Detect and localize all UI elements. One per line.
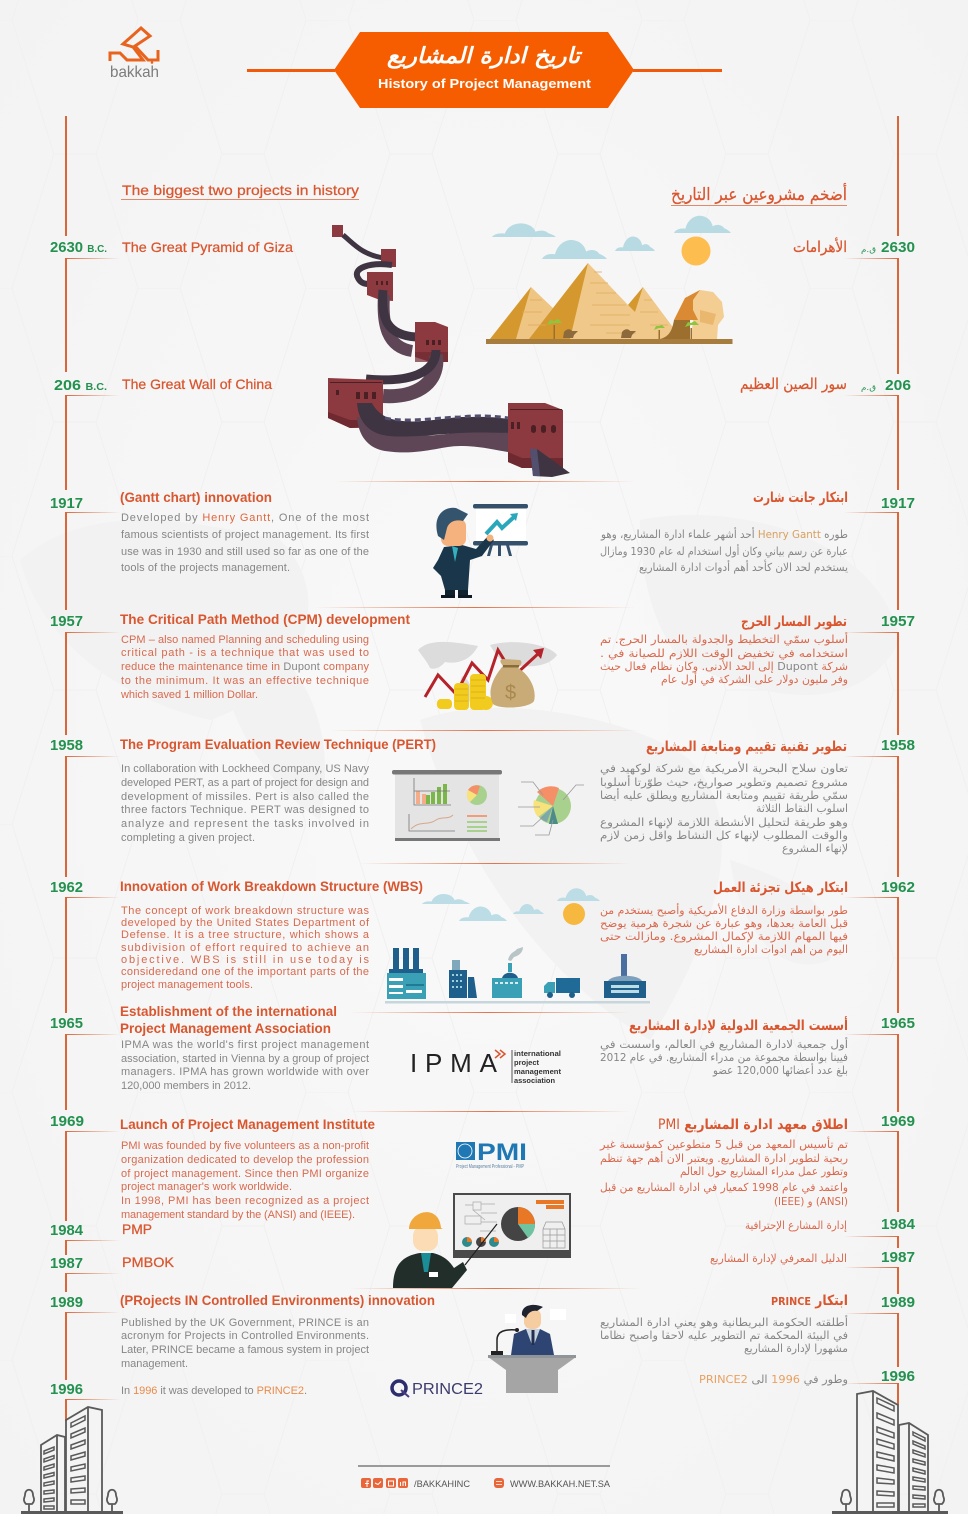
section: 1958 PERT, left: 1958: [50, 737, 83, 754]
illustration: speaker at podium: [488, 1305, 576, 1393]
body: PMI Arabic: [599, 1136, 848, 1208]
section: 1962 WBS, left: [50, 878, 423, 991]
section: 1957 CPM, right: [600, 613, 915, 686]
body: PERT Arabic: تعاون سلاح البحرية الأمريكية مع شركة لوكهيد في: [600, 761, 848, 775]
body: WBS: [121, 905, 370, 991]
body: PERT: development of missiles. Pert is also called the: [121, 791, 369, 803]
body: PMI Arabic: واعتمد في عام 1998 كمعيار في ادارة المشاريع من قبل: [600, 1181, 848, 1194]
title: English: History of Project Management: [378, 76, 592, 91]
body: Gantt chart: [121, 512, 369, 574]
illustration: presentation board and pie chart: [392, 770, 584, 841]
heading: WBS: Innovation of Work Breakdown Structure (WBS): [120, 878, 423, 894]
text: social handle: /BAKKAHINC: [414, 1479, 470, 1490]
body: PERT: analyze and represent the tasks involved in: [121, 818, 369, 830]
body: PERT Arabic: اسلوب النقاط الثلاثة: [756, 802, 848, 815]
logo: PMI: PMI: [477, 1139, 527, 1166]
logo: bakkah: bakkah: [110, 64, 159, 81]
section: 1989 PRINCE, left: 1989: [50, 1294, 83, 1311]
section: 1965 IPMA, right: 1965: [881, 1015, 915, 1032]
body: PRINCE: management.: [121, 1358, 188, 1370]
timeline: right: [844, 116, 899, 1405]
year: 1987 PMBOK: 1987: [50, 1255, 83, 1272]
body: PMI Arabic: تم تأسيس المعهد من قبل 5 متطوعين كمؤسسة غير: [599, 1136, 848, 1151]
body: PRINCE: Published by the UK Government, PRINCE is an: [121, 1317, 369, 1329]
body: PERT: In collaboration with Lockheed Company, US Navy: [121, 763, 370, 775]
body: CPM: which saved 1 million Dollar.: [120, 689, 258, 701]
body: WBS: developed by the United States Department of: [121, 917, 370, 929]
body: PRINCE: acronym for Projects in Controlled Environments.: [121, 1330, 369, 1342]
body: WBS Arabic: قبل العامة بعدها، وهو عبارة عن شجرة هرمية يوضح: [600, 917, 848, 930]
body: IPMA: [121, 1039, 369, 1092]
body: PERT Arabic: مشروع تصميم وتطوير صواريخ، حيث طوّرتا أسلوبا: [600, 775, 848, 789]
body: WBS Arabic: [600, 903, 848, 956]
section: 1969 PMI, right: [599, 1113, 916, 1266]
year: 1987 PMBOK: PMBOK: [122, 1254, 175, 1270]
year: 1987 PMBOK: [50, 1254, 175, 1272]
body: PRINCE: Later, PRINCE became a famous system in project: [121, 1344, 369, 1356]
heading: Gantt chart: (Gantt chart) innovation: [120, 489, 272, 505]
body: IPMA Arabic: فيينا بواسطة مجموعة من مدراء المشاريع. في عام 2012: [600, 1051, 848, 1064]
heading: CPM: The Critical Path Method (CPM) development: [120, 611, 410, 627]
body: PERT Arabic: لإنهاء المشروع: [782, 842, 848, 855]
section: 1957 CPM, left: 1957: [50, 613, 83, 630]
section: biggest projects, right: [671, 183, 915, 394]
heading: WBS Arabic: ابتكار هيكل تجزئة العمل: [713, 880, 848, 896]
body: WBS: project management tools.: [121, 979, 253, 991]
year: 1984 PMP: 1984: [50, 1222, 84, 1239]
year: 1996 Arabic: وطور في 1996 الى PRINCE2: [699, 1373, 848, 1386]
heading: IPMA: Project Management Association: [120, 1020, 331, 1036]
section: 1957 CPM, right: 1957: [881, 613, 915, 630]
heading: IPMA: Establishment of the international: [120, 1003, 337, 1019]
body: PRINCE Arabic: [600, 1315, 848, 1355]
logo: IPMA: [410, 1048, 562, 1085]
section: 1917 Gantt chart, right: [600, 490, 915, 574]
year: 1984 PMP: [50, 1221, 152, 1239]
illustration: engineer presenting on a screen: [393, 1193, 571, 1288]
body: PMI: [121, 1140, 369, 1221]
body: CPM Arabic: استخدامه في تخفيض الوقت اللازم للصيانة في .: [600, 647, 848, 660]
body: WBS: consideredand one of the important parts of the: [121, 966, 369, 978]
heading: Gantt Arabic: ابتكار جانت شارت: [753, 490, 848, 506]
heading: PERT: The Program Evaluation Review Technique (PERT): [120, 736, 436, 752]
body: CPM: reduce the maintenance time in Dupont company: [121, 661, 370, 673]
body: PMI Arabic: ربحية لتطوير ادارة المشاريع. ويعتبر الان أهم جهة تنظم: [600, 1151, 848, 1165]
year: 1996 PRINCE2: [50, 1381, 307, 1398]
section: 1969 PMI, right: 1969: [881, 1113, 915, 1130]
year: 1984 Arabic: إدارة المشارع الإحترافية: [745, 1219, 847, 1232]
body: Gantt chart: tools of the projects management.: [121, 562, 290, 574]
heading: CPM Arabic: تطوير المسار الحرج: [741, 614, 847, 630]
body: PRINCE Arabic: في البيئة المحكمة تم التطوير عليه لاحقا واصبح نظاما: [600, 1329, 848, 1342]
year: 1996 Arabic: 1996: [881, 1368, 915, 1385]
timeline: left: [65, 116, 120, 1421]
section: 1962 WBS, left: 1962: [50, 879, 83, 896]
body: WBS Arabic: اليوم من اهم ادوات ادارة المشاريع: [694, 943, 848, 956]
section: 1965 IPMA, right: [600, 1015, 915, 1077]
label: Great Wall: The Great Wall of China: [122, 376, 272, 392]
section: 1989 PRINCE, right: 1989: [881, 1294, 915, 1311]
body: PERT: [121, 763, 370, 844]
body: Gantt Arabic: طوره Henry Gantt أحد أشهر علماء ادارة المشاريع، وهو: [600, 527, 848, 541]
illustration: industrial skyline: [385, 888, 650, 1004]
year: 2630 B.C.: 2630 B.C.: [50, 239, 107, 256]
heading: PMI Arabic: اطلاق معهد ادارة المشاريع PMI: [658, 1117, 848, 1133]
year: 1996 PRINCE2: 1996: [50, 1381, 83, 1398]
year: 1996 Arabic: [699, 1368, 915, 1386]
body: PERT Arabic: والوقت المطلوب لإنهاء كل النشاط واقل زمن لازم: [600, 829, 848, 842]
body: CPM Arabic: وفر مليون دولار على الشركة في أول عام: [661, 672, 848, 686]
body: IPMA: IPMA was the world's first project management: [121, 1039, 369, 1051]
section: 1969 PMI, left: [50, 1113, 375, 1272]
logo: PMI: Project Management Professional - PMP: [456, 1164, 524, 1170]
section: 1958 PERT, right: [600, 737, 915, 855]
label: wall Arabic: سور الصين العظيم: [740, 375, 847, 393]
illustration: money and rising arrow: [418, 642, 557, 710]
year: 1987 Arabic: [710, 1249, 915, 1266]
section: 1917 Gantt chart, left: [50, 489, 369, 574]
body: PERT: completing a given project.: [121, 832, 255, 844]
illustration: pyramids and sphinx: [486, 216, 732, 344]
text: website: WWW.BAKKAH.NET.SA: [510, 1479, 611, 1490]
body: WBS: subdivision of effort required to achieve an: [121, 942, 369, 954]
body: Gantt chart: use was in 1930 and still used so far as one of the: [121, 546, 369, 558]
body: CPM Arabic: شركة Dupont إلى الحد الأدنى. وكان نظام فعال حيث: [600, 659, 848, 673]
year: 1987 Arabic: 1987: [881, 1249, 915, 1266]
section: biggest projects, right: ق.م: [861, 383, 876, 392]
year: 1984 Arabic: 1984: [881, 1216, 916, 1233]
section: 1958 PERT, right: 1958: [881, 737, 915, 754]
section: biggest projects, left: [50, 182, 359, 394]
body: PRINCE: [121, 1317, 369, 1370]
logo: IPMA: IPMA: [410, 1048, 498, 1078]
body: WBS: Defense. It is a tree structure, which shows a: [121, 929, 370, 941]
body: PERT Arabic: سمّي طريقة تقييم ومتابعة المشاريع ويطلق عليه أيضا: [600, 788, 848, 803]
section: 1989 PRINCE, right: [600, 1293, 915, 1386]
body: CPM: to the minimum. It was an effective technique: [121, 675, 369, 687]
year: 1984 Arabic: [745, 1216, 916, 1233]
body: CPM: CPM – also named Planning and scheduling using: [121, 634, 369, 646]
footer: contacts: [358, 1465, 611, 1490]
body: PMI Arabic: وتطور عمل مدراء المشاريع حول العالم: [680, 1165, 848, 1178]
year: 206 Arabic: 206: [885, 377, 911, 394]
body: Gantt chart: Developed by Henry Gantt, One of the most: [121, 512, 369, 524]
body: PMI: of project management. Since then PMI organize: [121, 1168, 369, 1180]
body: WBS Arabic: طور بواسطة وزارة الدفاع الأمريكية وأصبح يستخدم من: [600, 903, 848, 917]
illustration: presenter with chart: [433, 504, 528, 598]
title: Arabic: تاريخ ادارة المشاريع: [387, 44, 583, 69]
body: Gantt chart: famous scientists of project management. Its first: [121, 529, 369, 541]
icon: globe: [494, 1478, 504, 1488]
year: 206 B.C.: 206 B.C.: [54, 377, 107, 394]
body: IPMA Arabic: [600, 1037, 848, 1077]
body: PERT: developed PERT, as a part of project for design and: [121, 777, 369, 789]
illustration: money and rising arrow: $: [505, 682, 516, 704]
body: CPM: critical path - is a technique that was used to: [121, 647, 369, 659]
body: IPMA Arabic: بلغ عدد أعضائها 120,000 عضو: [712, 1063, 848, 1077]
heading: biggest two projects: The biggest two projects in history: [122, 182, 359, 198]
section: 1917 Gantt chart, right: 1917: [881, 495, 915, 512]
logo: IPMA: project: [514, 1058, 539, 1067]
body: PRINCE Arabic: مشهورا لإدارة المشاريع: [744, 1342, 848, 1355]
body: PMI Arabic: (ANSI) و (IEEE): [774, 1195, 848, 1208]
body: WBS: objective. WBS is still in use today is: [121, 954, 370, 966]
year: 1996 PRINCE2: In 1996 it was developed to PRINCE2.: [121, 1385, 307, 1397]
heading: PERT Arabic: تطوير تقنية تقييم ومتابعة المشاريع: [646, 739, 847, 755]
body: WBS Arabic: فيها المهام اللازمة لإكمال المشروع. ومازالت حتى: [600, 930, 848, 943]
section: 1965 IPMA, left: [50, 1003, 369, 1092]
logo: PMI: [456, 1139, 527, 1170]
heading: PRINCE: (PRojects IN Controlled Environments) innovation: [120, 1292, 435, 1308]
year: 1984 PMP: PMP: [122, 1221, 152, 1237]
logo: IPMA: international: [514, 1049, 561, 1058]
icons: social: [361, 1478, 408, 1488]
section: 1957 CPM, left: [50, 611, 410, 701]
logo: IPMA: management: [514, 1067, 562, 1076]
section: 1917 Gantt chart, left: 1917: [50, 495, 83, 512]
body: PERT Arabic: [600, 761, 848, 855]
body: CPM Arabic: أسلوب سمّي التخطيط والجدولة بالمسار الحرج. تم: [600, 632, 848, 646]
logo: PRINCE2: PRINCE2: [412, 1381, 483, 1398]
body: PRINCE Arabic: أطلقته الحكومة البريطانية وهو يعني ادارة المشاريع: [600, 1315, 848, 1329]
body: IPMA Arabic: أول جمعية لادارة المشاريع في العالم، واسست في: [600, 1037, 848, 1051]
title banner: [247, 32, 722, 108]
body: WBS: The concept of work breakdown structure was: [121, 905, 370, 917]
body: PMI: PMI was founded by five volunteers as a non-profit: [121, 1140, 369, 1152]
year: 1987 Arabic: الدليل المعرفي لإدارة المشاريع: [710, 1252, 847, 1265]
heading: PRINCE Arabic: ابتكار PRINCE: [771, 1293, 848, 1309]
body: PERT: three factors Technique. PERT was designed to: [121, 804, 369, 816]
section: biggest projects, right: ق.م: [861, 245, 876, 254]
heading: PMI: Launch of Project Management Institute: [120, 1116, 375, 1132]
heading: IPMA: [120, 1003, 337, 1036]
heading: IPMA Arabic: أسست الجمعية الدولية لإدارة المشاريع: [629, 1016, 848, 1034]
body: Gantt Arabic: [600, 527, 848, 574]
illustration: buildings left: [21, 1407, 123, 1514]
body: PMI: organization dedicated to develop the profession: [121, 1154, 369, 1166]
label: pyramids Arabic: الأهرامات: [793, 237, 847, 256]
logo: bakkah: [110, 28, 159, 81]
body: CPM Arabic: [600, 632, 848, 686]
illustration: buildings right: [832, 1391, 948, 1514]
illustration: great wall: [328, 225, 570, 477]
year: 2630 Arabic: 2630: [881, 239, 915, 256]
body: Gantt Arabic: يستخدم لحد الان كأحد أهم أدوات ادارة المشاريع: [639, 559, 848, 574]
section: 1969 PMI, left: 1969: [50, 1113, 84, 1130]
body: IPMA: 120,000 members in 2012.: [121, 1080, 251, 1092]
logo: IPMA: association: [514, 1076, 555, 1085]
body: Gantt Arabic: عبارة عن رسم بياني وكان أول استخدام له عام 1930 ومازال: [600, 544, 848, 558]
body: IPMA: managers. IPMA has grown worldwide with over: [121, 1066, 369, 1078]
label: Giza: The Great Pyramid of Giza: [122, 239, 293, 255]
section: 1962 WBS, right: [600, 879, 915, 956]
body: PMI: In 1998, PMI has been recognized as a project: [121, 1195, 369, 1207]
section: 1958 PERT, left: [50, 736, 436, 844]
heading: Arabic biggest projects: أضخم مشروعين عبر التاريخ: [671, 183, 847, 205]
body: CPM: [120, 634, 370, 701]
body: PMI: management standard by the (ANSI) and (IEEE).: [121, 1209, 355, 1221]
body: PERT Arabic: وهو طريقة لتحليل الأنشطة اللازمة لإنهاء المشروع: [600, 815, 848, 829]
body: PMI: project manager's work worldwide.: [121, 1181, 292, 1193]
section: 1962 WBS, right: 1962: [881, 879, 915, 896]
body: IPMA: association, started in Vienna by a group of project: [121, 1053, 369, 1065]
section: 1989 PRINCE, left: [50, 1292, 435, 1398]
section: 1965 IPMA, left: 1965: [50, 1015, 83, 1032]
